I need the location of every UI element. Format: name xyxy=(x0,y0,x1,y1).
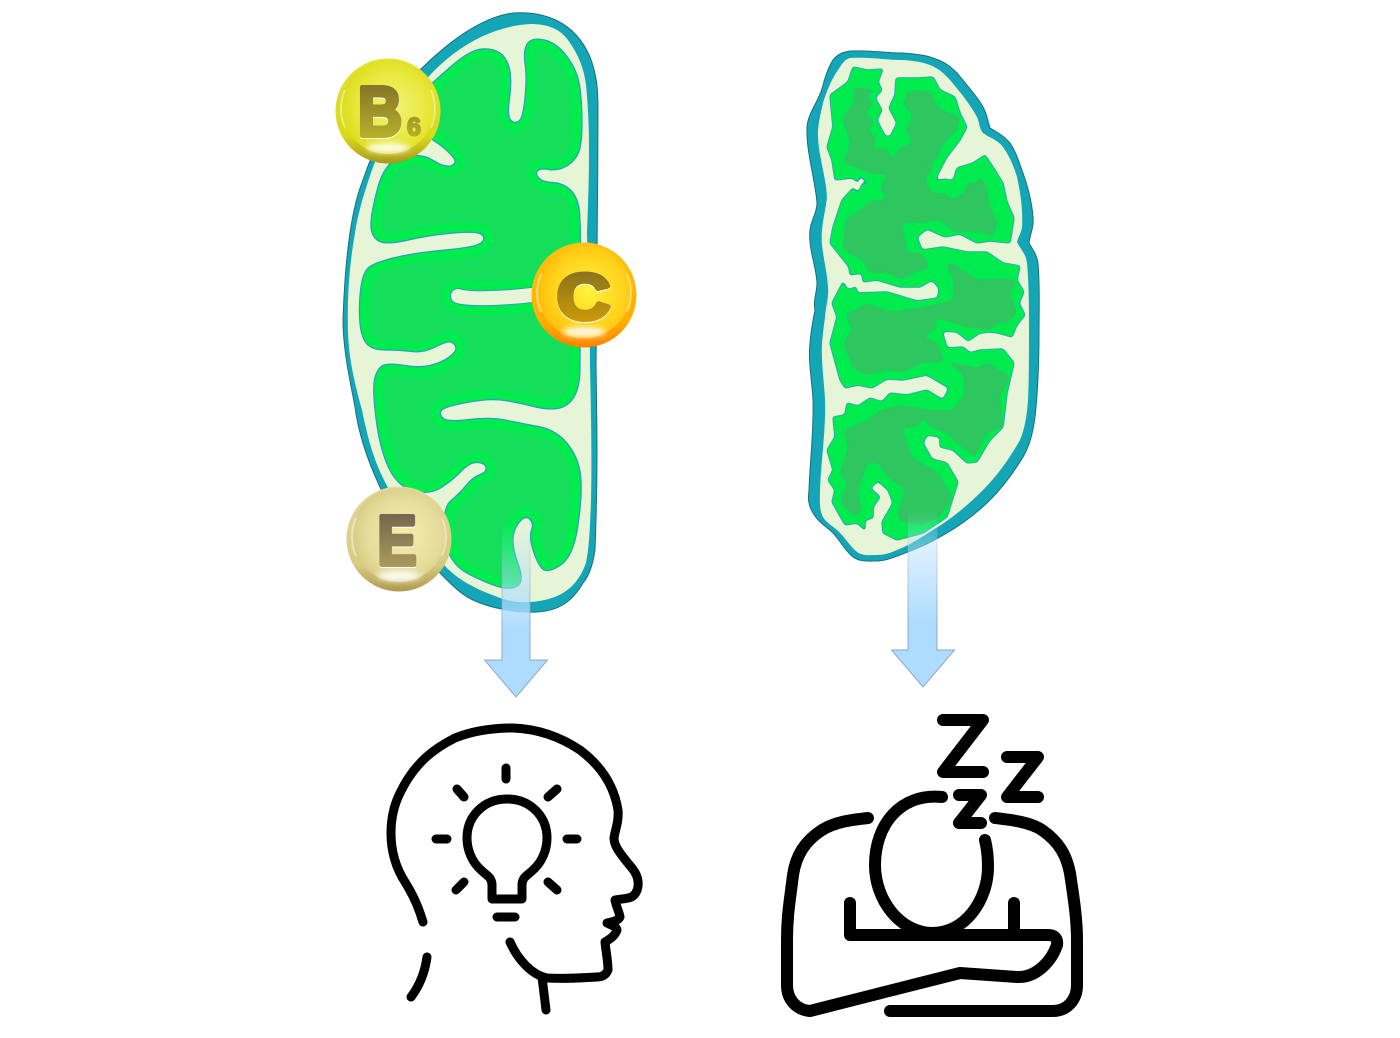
arrow: healthy mitochondrion to cognition xyxy=(484,522,548,697)
big Z xyxy=(943,720,983,772)
outer membrane xyxy=(807,51,1039,561)
forearm edge xyxy=(1008,903,1020,935)
outer membrane xyxy=(343,13,598,612)
vitamin B6 capsule xyxy=(336,58,440,164)
bulb base xyxy=(497,912,515,922)
right shoulder and body xyxy=(890,818,1077,1011)
neck front xyxy=(542,977,546,1010)
vitamin B6 capsule: 6 xyxy=(407,114,421,142)
small Z xyxy=(959,795,981,823)
damaged mitochondrion xyxy=(807,51,1039,561)
arrow: damaged mitochondrion to sleep xyxy=(892,512,954,687)
head profile xyxy=(391,728,638,978)
vitamin B6 capsule: B xyxy=(358,72,402,150)
vitamin C capsule: C xyxy=(557,261,610,333)
vitamin E capsule: E xyxy=(378,502,416,580)
vitamin C capsule: C xyxy=(557,262,610,334)
vitamin C capsule xyxy=(532,242,636,348)
vitamin B6 capsule: B xyxy=(358,74,402,152)
icon: head with light bulb xyxy=(391,728,638,1010)
icon: sleeping person xyxy=(787,720,1077,1011)
vitamin E capsule xyxy=(346,486,452,592)
bulb xyxy=(467,799,547,899)
cristae xyxy=(359,39,582,588)
intermembrane space xyxy=(348,24,591,602)
bulb rays xyxy=(436,768,577,890)
vitamin E capsule: E xyxy=(378,502,416,580)
healthy mitochondrion xyxy=(343,13,598,612)
left arm and body xyxy=(787,818,1057,1011)
neck back xyxy=(411,957,427,997)
head xyxy=(875,797,988,933)
medium Z xyxy=(1007,757,1038,797)
damaged cristae xyxy=(827,67,1025,540)
intermembrane space xyxy=(818,58,1029,555)
